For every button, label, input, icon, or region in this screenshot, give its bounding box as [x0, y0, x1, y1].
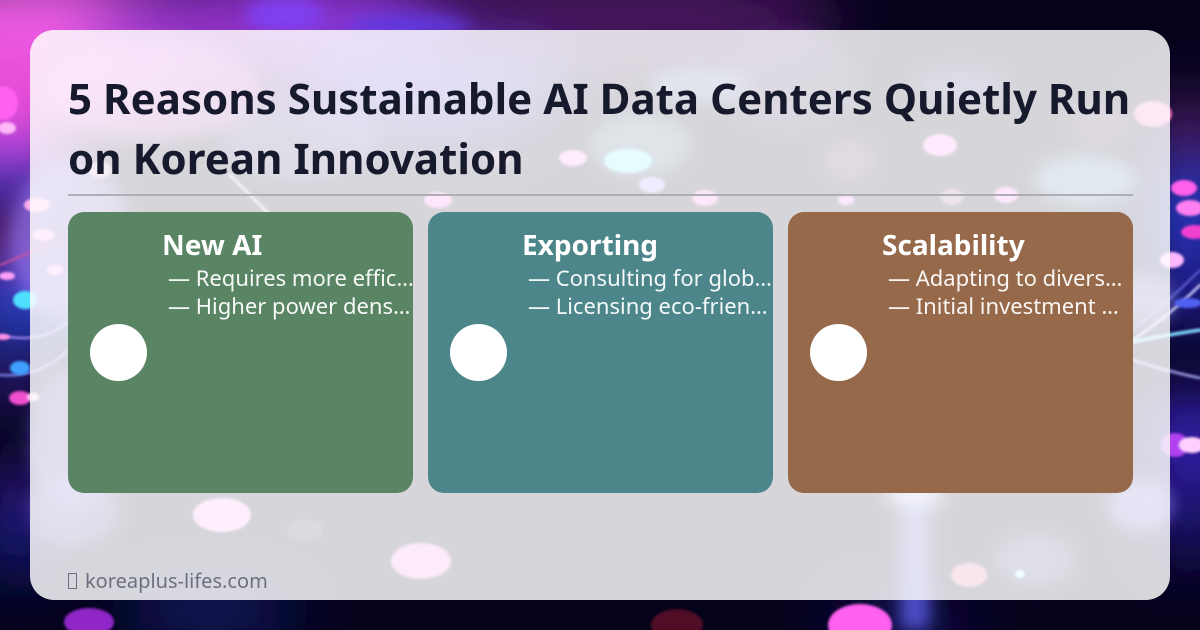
title: on Korean Innovation — [68, 130, 524, 187]
card: Exporting — [428, 212, 773, 493]
icon: white circle — [450, 324, 507, 381]
icon: white circle — [90, 324, 147, 381]
title: 5 Reasons Sustainable AI Data Centers Quietly Run — [68, 70, 1130, 127]
card heading: Scalability — [882, 226, 1025, 264]
card bullet list — [888, 264, 1122, 320]
card bullet list — [168, 264, 413, 320]
icon: white circle — [810, 324, 867, 381]
card: Scalability — [788, 212, 1133, 493]
card heading: New AI — [162, 226, 262, 264]
card heading: Exporting — [522, 226, 658, 264]
card: New AI — [68, 212, 413, 493]
card bullet list — [528, 264, 772, 320]
divider under title — [68, 194, 1133, 196]
title — [68, 70, 1130, 187]
footer: source site: koreaplus-lifes.com — [85, 567, 268, 594]
